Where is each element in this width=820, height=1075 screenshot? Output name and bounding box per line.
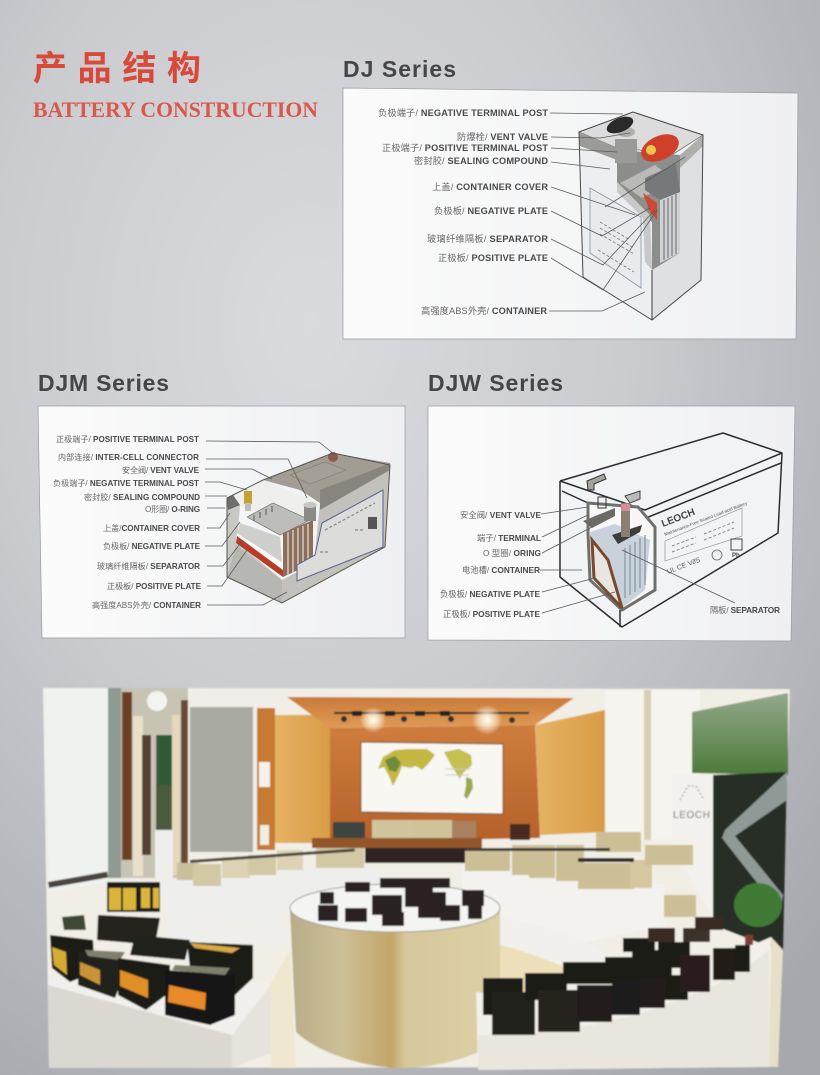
labels: DJ: 防爆栓/ VENT VALVE [457, 131, 548, 142]
labels: DJ: 负极端子/ NEGATIVE TERMINAL POST [378, 107, 548, 118]
labels: DJ: 上盖/ CONTAINER COVER [432, 181, 548, 192]
concrete column [190, 707, 253, 852]
labels: DJM: 负极板/ NEGATIVE PLATE [103, 541, 201, 551]
right white riser [462, 865, 665, 945]
right curved platform [476, 937, 771, 1070]
labels: DJM [53, 434, 202, 610]
heading: DJ Series: DJ Series [343, 56, 456, 82]
labels: DJW: O 型圈/ ORING [483, 548, 541, 558]
panel background [343, 88, 798, 339]
labels: DJ: 密封胶/ SEALING COMPOUND [414, 155, 548, 166]
left white riser [160, 865, 395, 975]
labels: DJW [440, 510, 780, 619]
panel: DJ Series diagram [343, 88, 798, 339]
labels: DJW: 隔板/ SEPARATOR [710, 605, 780, 615]
product label: LEOCH on DJW case: Maintenance-Free Sealed Lead-acid Battery [664, 500, 748, 537]
labels: DJ: 高强度ABS外壳/ CONTAINER [421, 305, 547, 316]
labels: DJM: O形圈/ O-RING [145, 505, 200, 514]
leader lines: DJM [205, 441, 335, 605]
yellow batteries at left [107, 882, 160, 912]
labels: DJM: 密封胶/ SEALING COMPOUND [84, 492, 200, 502]
back wall [330, 725, 540, 842]
car batteries on left platform [50, 915, 253, 1025]
ceiling [287, 697, 574, 728]
panel background [428, 406, 795, 641]
labels: DJ: 负极板/ NEGATIVE PLATE [434, 205, 548, 216]
left window [44, 689, 108, 892]
company banner [692, 693, 788, 952]
floor tiers [270, 950, 296, 1068]
labels: DJW: 端子/ TERMINAL [477, 533, 541, 543]
labels: DJM: 上盖/CONTAINER COVER [103, 523, 200, 533]
labels: DJ [378, 107, 548, 316]
labels: DJ: 玻璃纤维隔板/ SEPARATOR [427, 233, 548, 244]
central cylinder display [290, 878, 500, 1068]
track lights [334, 705, 529, 735]
photo base [43, 688, 790, 1068]
photo: showroom with battery displays [43, 688, 790, 1070]
labels: DJM: 负极端子/ NEGATIVE TERMINAL POST [53, 478, 199, 488]
floor at right edge [769, 937, 783, 1067]
product label: LEOCH on DJW case [660, 500, 748, 576]
labels: DJM: 高强度ABS外壳/ CONTAINER [92, 600, 201, 610]
wood wall left [257, 708, 331, 850]
left platform [48, 978, 271, 1068]
LEOCH sign [672, 775, 713, 915]
labels: DJW: 安全阀/ VENT VALVE [460, 510, 541, 520]
labels: DJM: 内部连接/ INTER-CELL CONNECTOR [58, 452, 199, 462]
title: Chinese heading: 产品结构 [33, 50, 201, 88]
right white wall [605, 690, 700, 840]
panel: DJW Series diagram [428, 406, 795, 641]
labels: DJ: 正极端子/ POSITIVE TERMINAL POST [382, 142, 548, 153]
labels: DJM: 正极端子/ POSITIVE TERMINAL POST [56, 434, 199, 444]
mirror column [108, 688, 188, 878]
heading: DJW Series: DJW Series [428, 370, 563, 396]
labels: DJM: 安全阀/ VENT VALVE [122, 465, 200, 475]
labels: DJW: 电池槽/ CONTAINER [462, 565, 540, 575]
battery illustration: DJW [560, 433, 782, 627]
right wood panel [535, 710, 605, 835]
battery illustration: DJ [579, 112, 703, 320]
labels: DJW: 正极板/ POSITIVE PLATE [443, 609, 540, 619]
back table and batteries [312, 820, 530, 863]
world map [361, 742, 503, 814]
product label: LEOCH on DJW case: Pb [732, 553, 740, 559]
labels: DJ: 正极板/ POSITIVE PLATE [438, 252, 548, 263]
labels: DJW: 负极板/ NEGATIVE PLATE [440, 589, 540, 599]
panel background [38, 406, 405, 638]
LEOCH sign: LEOCH [673, 810, 710, 821]
leader lines: DJW [540, 507, 735, 613]
labels: DJM: 玻璃纤维隔板/ SEPARATOR [97, 561, 200, 571]
back right beige batteries [465, 832, 696, 917]
title: English heading: BATTERY CONSTRUCTION [33, 97, 318, 122]
labels: DJM: 正极板/ POSITIVE PLATE [107, 581, 202, 591]
heading: DJM Series: DJM Series [38, 370, 169, 396]
back left beige batteries [177, 848, 364, 886]
product label: LEOCH on DJW case: UL CE V∂S [666, 557, 702, 576]
leader lines: DJ [549, 113, 685, 311]
battery illustration: DJM [227, 452, 390, 603]
panel: DJM Series diagram [38, 406, 405, 638]
product label: LEOCH on DJW case: LEOCH [660, 507, 697, 530]
batteries on right platform [483, 917, 753, 1035]
